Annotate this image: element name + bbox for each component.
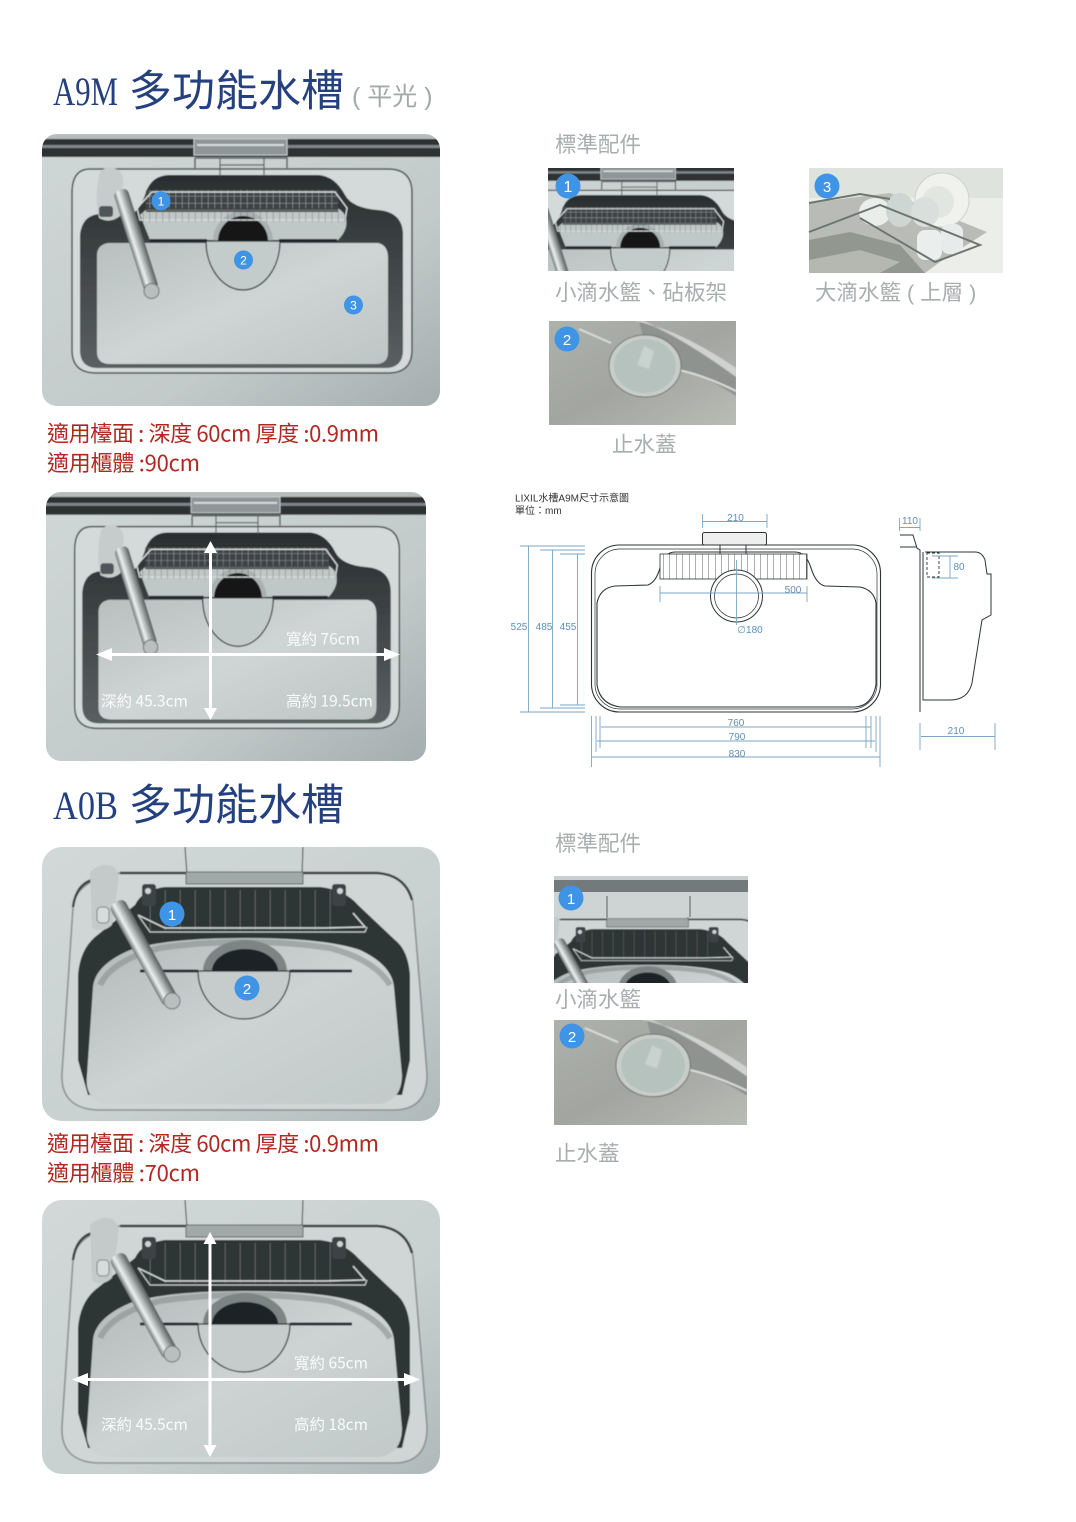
title: A0B: 多功能水槽 — [129, 782, 344, 830]
photo: A0B sink with numbered parts — [42, 847, 440, 1121]
title: A0B: A0B — [53, 783, 118, 828]
badge 2 — [234, 976, 260, 1000]
badge 1 — [160, 902, 184, 926]
text: A0B fit specification: 適用檯面 : 深度 60cm 厚度 :0.9mm — [47, 1126, 379, 1158]
arrow: width horizontal — [96, 648, 400, 661]
thumbnail 3: large dish basket — [809, 168, 1003, 273]
dimension values: 485 — [536, 622, 553, 633]
thumbnail 1: A0B small basket — [462, 868, 826, 1106]
arrow: depth vertical — [204, 541, 217, 720]
arrow: width horizontal — [72, 1373, 420, 1386]
badge 2: 2 — [240, 254, 247, 268]
caption: large basket: 大滴水籃 ( 上層 ) — [815, 281, 976, 305]
label: depth: 深約 45.3cm — [101, 690, 188, 712]
label: width: 寬約 76cm — [286, 628, 360, 650]
text: A0B fit specification — [47, 1126, 379, 1188]
thumbnail 1: A0B small basket: 1 — [567, 891, 575, 908]
text: A9M fit specification — [47, 416, 379, 478]
badge 1: 1 — [168, 907, 176, 924]
drawing caption: LIXIL水槽A9M尺寸示意圖 — [515, 492, 629, 504]
label: height: 高約 18cm — [294, 1413, 368, 1435]
photo: A9M sink with numbered parts — [42, 134, 440, 406]
thumbnail 3: large dish basket: 3 — [823, 179, 831, 196]
title: A9M — [53, 68, 433, 116]
caption: A0B small basket: 小滴水籃 — [555, 988, 641, 1012]
dimension values: 500 — [785, 585, 802, 596]
thumbnail 2: drain cover A9M — [547, 319, 738, 427]
thumbnail 1: small basket and cutting board rack — [445, 135, 846, 407]
badge 3 — [344, 296, 363, 314]
label: depth: 深約 45.5cm — [101, 1413, 188, 1435]
caption: drain cover: 止水蓋 — [612, 433, 677, 457]
dimension values: 790 — [729, 732, 746, 743]
dimension values: ∅180 — [737, 625, 763, 636]
dimension values: 760 — [728, 718, 745, 729]
drawing caption — [515, 492, 629, 517]
text: A0B fit specification: 適用櫃體 :70cm — [47, 1156, 200, 1188]
dimension values: 110 — [902, 516, 918, 527]
text: A9M fit specification: 適用櫃體 :90cm — [47, 446, 200, 478]
plan view outline — [592, 532, 880, 712]
badge 1: 1 — [158, 194, 165, 208]
badge 3: 3 — [350, 298, 357, 312]
dimension values: 210 — [948, 726, 965, 737]
side view outline — [900, 535, 991, 712]
thumbnail 2: A0B drain cover: 2 — [568, 1029, 576, 1046]
dimension values: 525 — [511, 622, 528, 633]
caption: small basket: 小滴水籃、砧板架 — [555, 281, 727, 305]
thumbnail 1: small basket and cutting board rack: 1 — [564, 179, 573, 196]
dimension drawing: LIXIL A9M — [511, 492, 995, 767]
thumbnail 2: drain cover A9M: 2 — [563, 332, 571, 349]
label: width: 寬約 65cm — [294, 1352, 368, 1374]
dimension values: 80 — [953, 562, 965, 573]
dimension values: 210 — [727, 513, 744, 524]
dimension values — [511, 513, 965, 760]
title: A9M: A9M — [53, 69, 118, 114]
drawing caption: 單位：mm — [515, 504, 562, 517]
label: height: 高約 19.5cm — [286, 690, 373, 712]
thumbnail 2: A0B drain cover — [552, 1018, 749, 1127]
text: A9M fit specification: 適用檯面 : 深度 60cm 厚度 :0.9mm — [47, 416, 379, 448]
dimension values: 455 — [560, 622, 577, 633]
photo: A9M sink dimensions — [46, 492, 426, 761]
badge 1 — [152, 192, 170, 210]
title: A9M: 多功能水槽 — [129, 68, 344, 116]
heading: standard accessories A0B: 標準配件 — [555, 832, 641, 856]
title: A9M: ( 平光 ) — [352, 83, 433, 111]
badge 2: 2 — [243, 981, 251, 998]
badge 2 — [234, 250, 253, 270]
photo: A0B sink dimensions — [42, 1200, 440, 1474]
arrow: depth vertical — [204, 1232, 216, 1457]
dimension lines — [520, 514, 995, 767]
heading: standard accessories A9M: 標準配件 — [555, 133, 641, 157]
dimension values: 830 — [729, 749, 746, 760]
caption: A0B drain cover: 止水蓋 — [555, 1142, 620, 1166]
